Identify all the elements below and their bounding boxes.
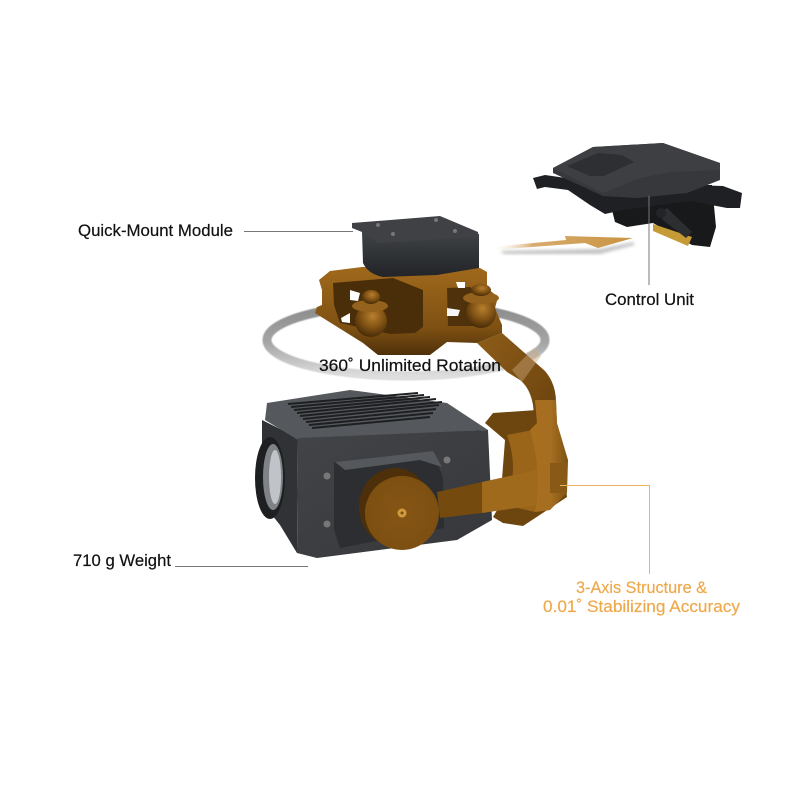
bracket gaps (341, 290, 360, 323)
joint drum (505, 430, 550, 512)
side recess (334, 451, 444, 548)
gold connector (653, 224, 692, 246)
screws (324, 472, 330, 480)
recess highlight (335, 451, 442, 470)
top face (265, 390, 488, 440)
control unit (533, 143, 742, 247)
lens (255, 437, 285, 519)
raised ridge (567, 153, 634, 176)
gimbal joint (485, 400, 568, 526)
label: stabilization: 0.01˚ Stabilizing Accuracy (543, 598, 741, 616)
left damper ball (352, 290, 388, 337)
counterweight disc (359, 468, 439, 550)
quick-mount bracket (315, 267, 502, 355)
underside electronics (575, 185, 716, 247)
front bezel (262, 420, 298, 553)
label: stabilization (543, 579, 741, 616)
label: rotation: 360˚ Unlimited Rotation (319, 357, 501, 375)
upright (530, 400, 568, 512)
right damper ball (463, 284, 499, 328)
label: control unit: Control Unit (605, 291, 694, 309)
heatsink slats (288, 393, 442, 428)
label: quick-mount: Quick-Mount Module (78, 222, 233, 240)
gimbal arm: upper (477, 333, 557, 425)
leader: quick-mount (244, 230, 353, 232)
camera body (255, 390, 492, 558)
rotation ring (267, 304, 545, 376)
leader: stabilization (560, 486, 650, 574)
leader: weight (175, 566, 308, 568)
right opening (447, 287, 488, 326)
lever (656, 208, 692, 238)
ring highlight over arm (512, 348, 541, 382)
quick-mount module (352, 216, 479, 277)
arrow: to control unit (490, 236, 634, 254)
leader: control unit (648, 196, 650, 285)
label: stabilization: 3-Axis Structure & (576, 579, 707, 597)
counterweight arm (437, 470, 537, 518)
label: weight: 710 g Weight (73, 552, 171, 570)
side face (297, 430, 492, 558)
flange with mounting ears (533, 175, 742, 214)
main housing (553, 143, 720, 198)
left opening (333, 278, 423, 334)
